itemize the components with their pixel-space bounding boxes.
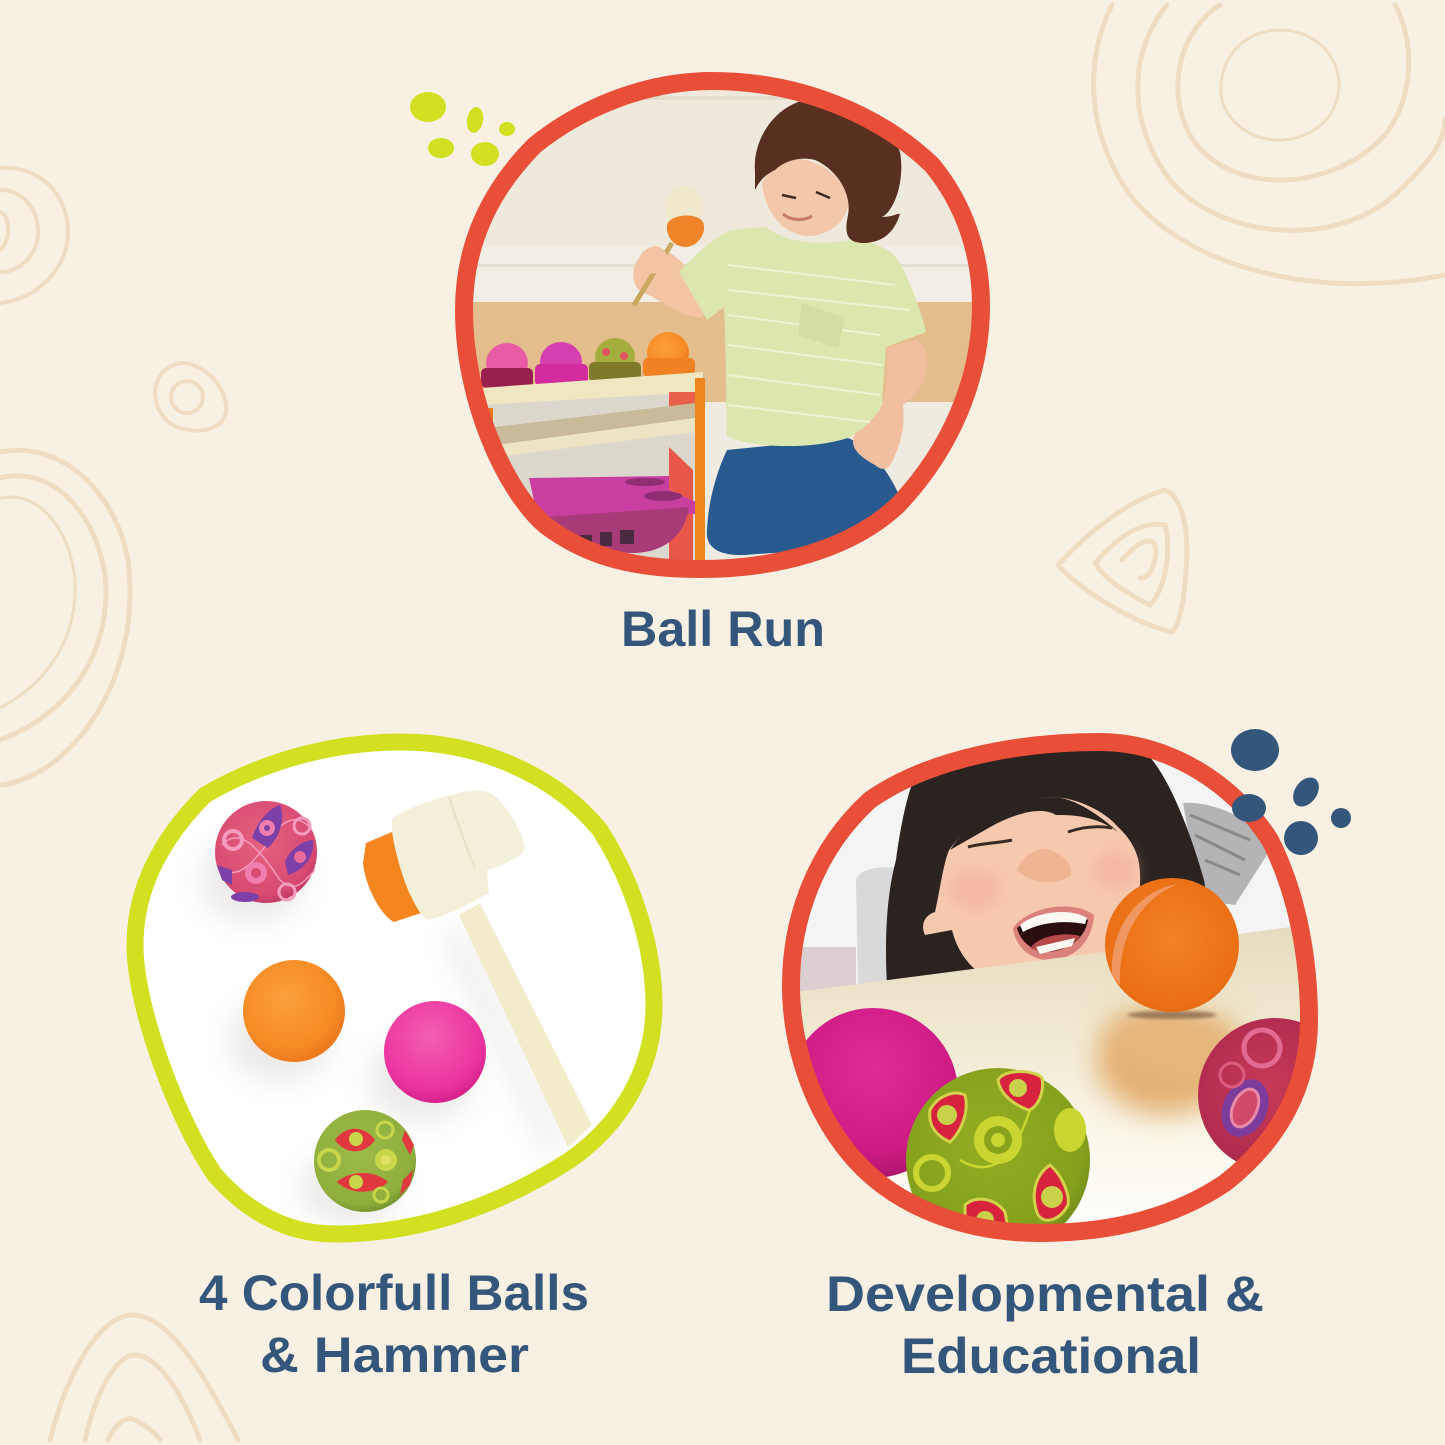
ball: pink patterned <box>215 801 317 903</box>
heading: ball run: Ball Run <box>621 601 825 657</box>
panel: balls and hammer <box>135 742 654 1234</box>
heading: developmental <box>826 1266 1264 1384</box>
ball: orange <box>243 960 345 1062</box>
decorative swirl: small circle <box>155 363 226 431</box>
ball: magenta <box>384 1001 486 1103</box>
decorative swirl: triangle right <box>1058 490 1187 632</box>
heading: developmental: Educational <box>901 1328 1201 1384</box>
heading: balls and hammer <box>199 1265 589 1383</box>
child <box>633 98 930 555</box>
icon: hammer <box>363 791 592 1147</box>
decorative swirl: left upper <box>0 168 68 303</box>
table <box>795 925 1305 1245</box>
frame: red outline <box>791 742 1309 1233</box>
decorative swirl: top right <box>1094 5 1445 284</box>
icon: lime dots <box>410 92 515 166</box>
ball: orange <box>1105 878 1239 1012</box>
ball: magenta <box>806 1008 957 1177</box>
photo: laughing child <box>800 751 1300 1224</box>
face <box>923 797 1140 985</box>
panel: ball run <box>455 80 1000 580</box>
shadows <box>200 838 565 1224</box>
icon: navy dots <box>1231 729 1351 855</box>
frame: lime outline <box>135 742 654 1234</box>
frame: red outline <box>464 81 981 569</box>
hair <box>886 748 1212 985</box>
ball: dark patterned <box>1198 1018 1300 1162</box>
heading: developmental: Developmental & <box>826 1266 1264 1322</box>
toy: ball run rack <box>470 332 705 565</box>
decorative swirl: bottom left <box>50 1315 238 1440</box>
mouth <box>1013 906 1094 960</box>
photo: child playing <box>473 90 972 560</box>
ball: green patterned <box>906 1068 1090 1224</box>
toy: hammer <box>634 186 704 305</box>
panel: developmental <box>780 735 1352 1252</box>
ball: green patterned <box>314 1110 416 1212</box>
heading: balls and hammer: & Hammer <box>260 1327 529 1383</box>
heading: balls and hammer: 4 Colorfull Balls <box>199 1265 589 1321</box>
decorative swirl: left large <box>0 450 130 785</box>
